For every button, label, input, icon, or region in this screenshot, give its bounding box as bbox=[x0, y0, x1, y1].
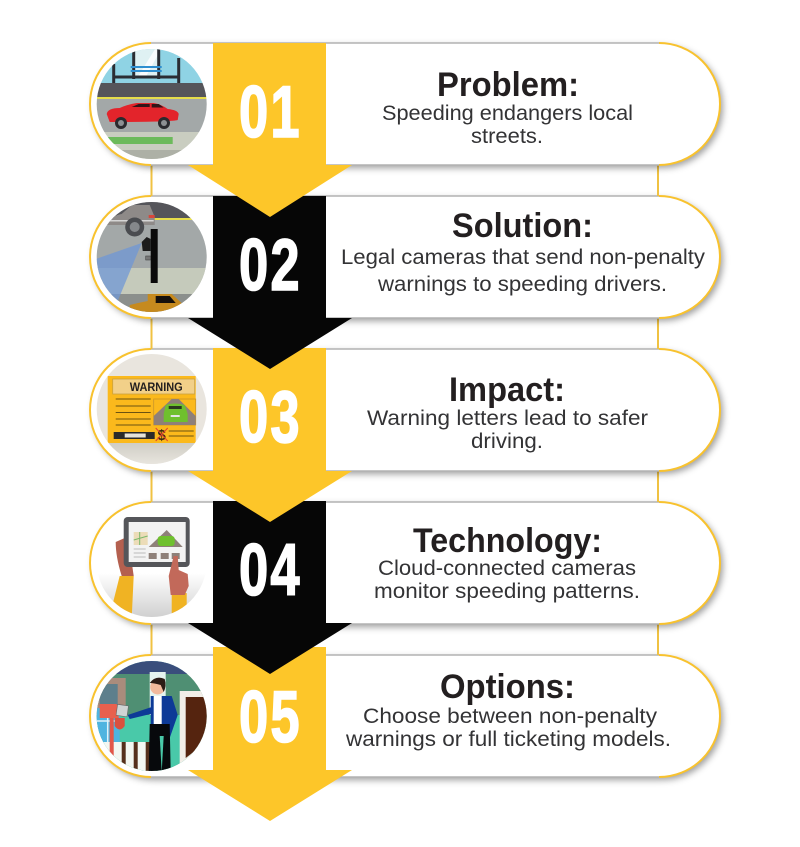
description: Legal cameras that send non-penalty bbox=[341, 246, 706, 269]
number: 04 bbox=[239, 530, 302, 611]
pill panel bbox=[90, 349, 720, 471]
arrow band bbox=[188, 647, 352, 821]
connector lines bbox=[152, 318, 658, 349]
description: warnings or full ticketing models. bbox=[345, 728, 671, 751]
illustration: warning letter: $ bbox=[158, 427, 167, 444]
pill panel bbox=[90, 196, 720, 318]
description bbox=[382, 102, 633, 148]
description: Warning letters lead to safer bbox=[367, 407, 648, 430]
connector lines bbox=[152, 624, 658, 655]
number: 02 bbox=[239, 225, 302, 306]
description bbox=[345, 705, 671, 751]
pill panel bbox=[90, 502, 720, 624]
heading: Solution: bbox=[452, 207, 593, 245]
heading: Impact: bbox=[449, 371, 565, 409]
illustration: speed camera bbox=[96, 201, 208, 313]
illustration: warning letter bbox=[96, 353, 208, 465]
description: monitor speeding patterns. bbox=[374, 580, 640, 603]
row 3: impact bbox=[90, 348, 720, 522]
description bbox=[341, 246, 706, 296]
description: streets. bbox=[471, 125, 543, 148]
illustration: speeding red car bbox=[96, 48, 208, 160]
description: driving. bbox=[471, 430, 543, 453]
illustration: man at mailbox bbox=[96, 660, 208, 772]
arrow band bbox=[188, 196, 352, 369]
illustration: warning letter: WARNING bbox=[130, 382, 183, 394]
row 1: problem bbox=[90, 43, 720, 217]
row 2: solution bbox=[90, 196, 720, 369]
heading: Technology: bbox=[413, 522, 602, 560]
row 4: technology bbox=[90, 501, 720, 674]
pill panel bbox=[90, 43, 720, 165]
pill panel bbox=[90, 655, 720, 777]
arrow band bbox=[188, 348, 352, 522]
heading: Options: bbox=[440, 668, 575, 706]
connector lines bbox=[152, 471, 658, 502]
description: Choose between non-penalty bbox=[363, 705, 658, 728]
illustration: hands holding tablet bbox=[100, 517, 203, 617]
row 5: options bbox=[90, 647, 720, 821]
number: 01 bbox=[239, 72, 302, 153]
description: warnings to speeding drivers. bbox=[377, 273, 667, 296]
description bbox=[374, 557, 640, 603]
number: 05 bbox=[239, 677, 302, 758]
number: 03 bbox=[239, 377, 302, 458]
arrow band bbox=[188, 43, 352, 217]
description: Speeding endangers local bbox=[382, 102, 633, 125]
description bbox=[367, 407, 648, 453]
heading: Problem: bbox=[437, 66, 579, 104]
description: Cloud-connected cameras bbox=[378, 557, 636, 580]
connector lines bbox=[152, 165, 658, 196]
arrow band bbox=[188, 501, 352, 674]
